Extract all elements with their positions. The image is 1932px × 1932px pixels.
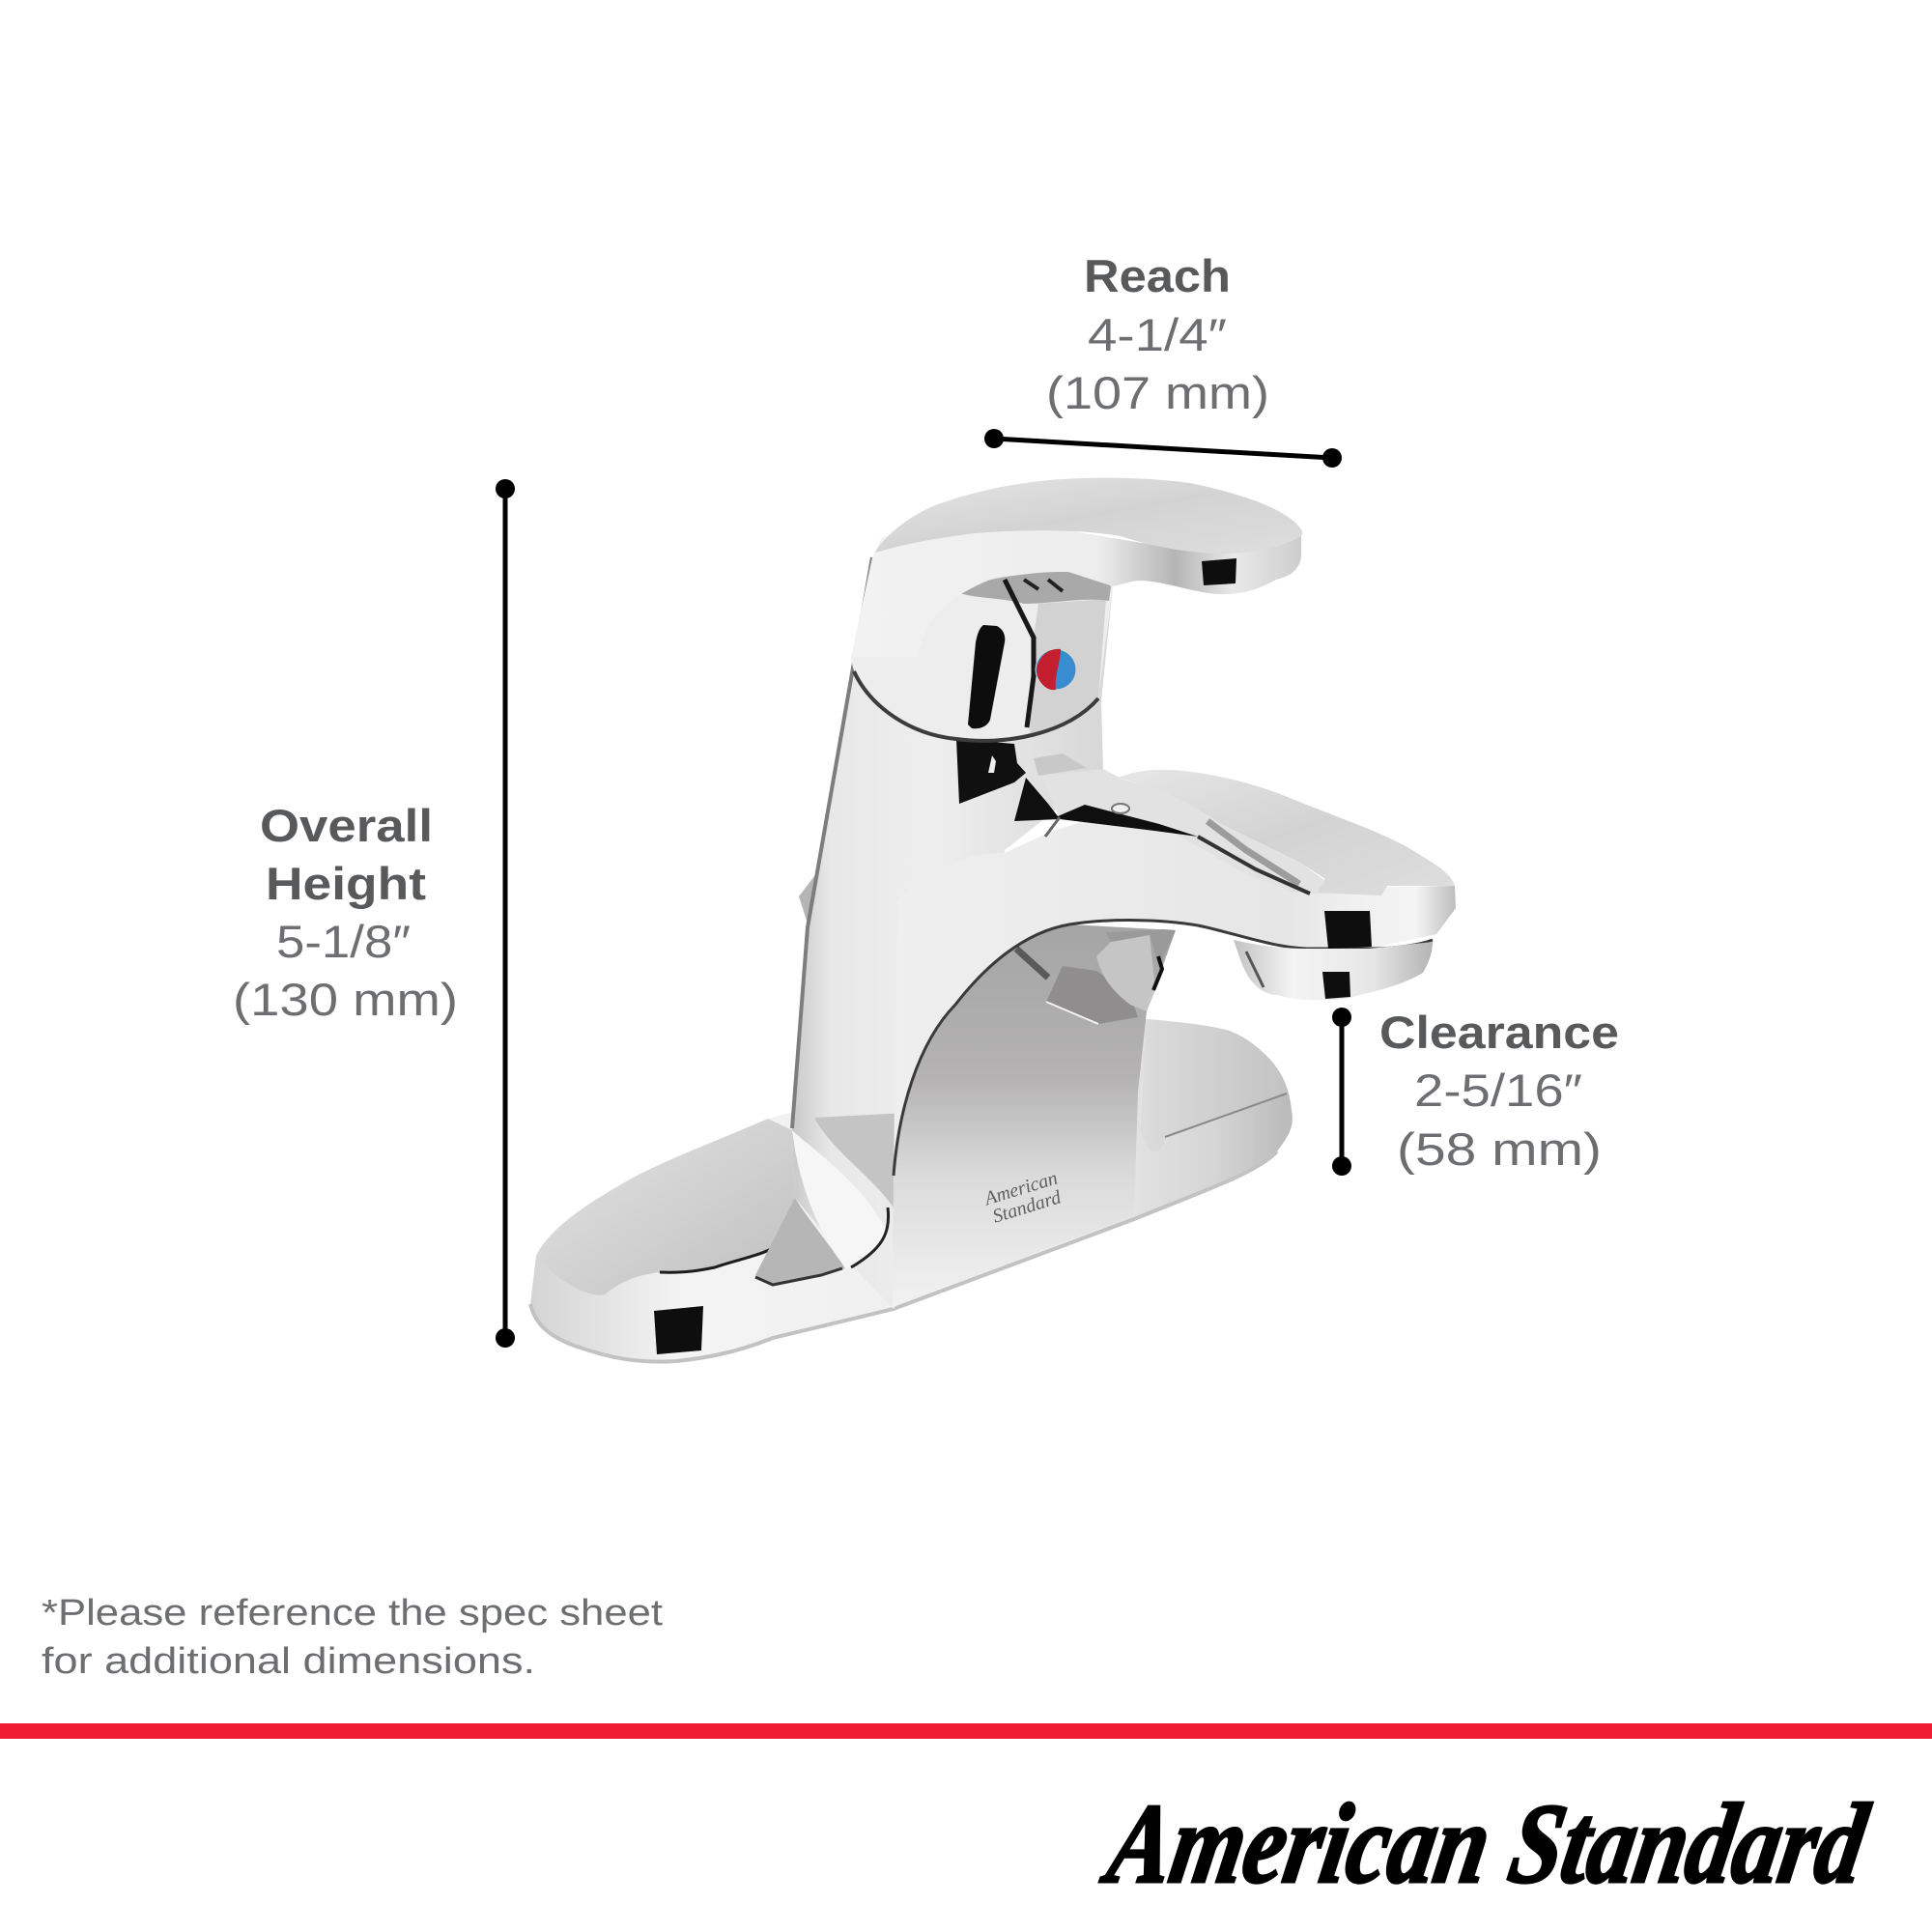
logo mark on faucet: Standard [990,1186,1065,1228]
right plate top surface [1141,1019,1288,1151]
reach label: 4-1/4″ [1088,309,1227,360]
overall height label: (130 mm) [233,974,458,1025]
base plate [530,1019,1293,1362]
reach label: Reach [1084,250,1231,301]
clearance dimension line [1332,1008,1351,1176]
faucet column [792,557,1113,1309]
flange blend [792,1130,888,1268]
overall height label [233,800,458,1025]
plate-side grey reflection [814,1113,906,1208]
pop-up rod [799,872,817,942]
clearance label: (58 mm) [1397,1123,1602,1175]
black reflection below ring [956,739,1026,804]
logo mark on faucet [980,1168,1065,1229]
reach label: (107 mm) [1046,367,1269,418]
left plate top surface [536,1119,795,1295]
handle neck [851,568,1113,741]
rim reflection [654,1306,703,1354]
under-arch details [1016,929,1176,1024]
footnote: for additional dimensions. [42,1641,535,1682]
handle slit reflection [968,625,1005,728]
reach label [1046,250,1269,418]
faucet illustration [530,478,1456,1362]
clearance label [1379,1007,1619,1175]
spout neck [1040,769,1325,894]
overall height label: Height [266,858,426,909]
logo mark on faucet: American [980,1168,1060,1210]
reach dimension line [984,429,1342,468]
footnote: *Please reference the spec sheet [42,1593,664,1634]
spout front [894,802,1456,1176]
handle chrome cap [956,572,1111,604]
clearance label: Clearance [1379,1007,1619,1058]
red divider band [0,1723,1932,1739]
lever handle top surface [875,478,1302,554]
spout lip reflection [1324,911,1372,949]
spout top surface [1118,770,1455,895]
hot cold indicator [1036,649,1076,690]
clearance label: 2-5/16″ [1414,1065,1582,1116]
overall height label: Overall [260,800,433,851]
lever handle underside [851,522,1301,657]
footnote [42,1593,664,1682]
overall height label: 5-1/8″ [276,916,411,967]
central front column [893,924,1176,1307]
aerator [1234,940,1433,1000]
overall height dimension line [496,479,515,1348]
